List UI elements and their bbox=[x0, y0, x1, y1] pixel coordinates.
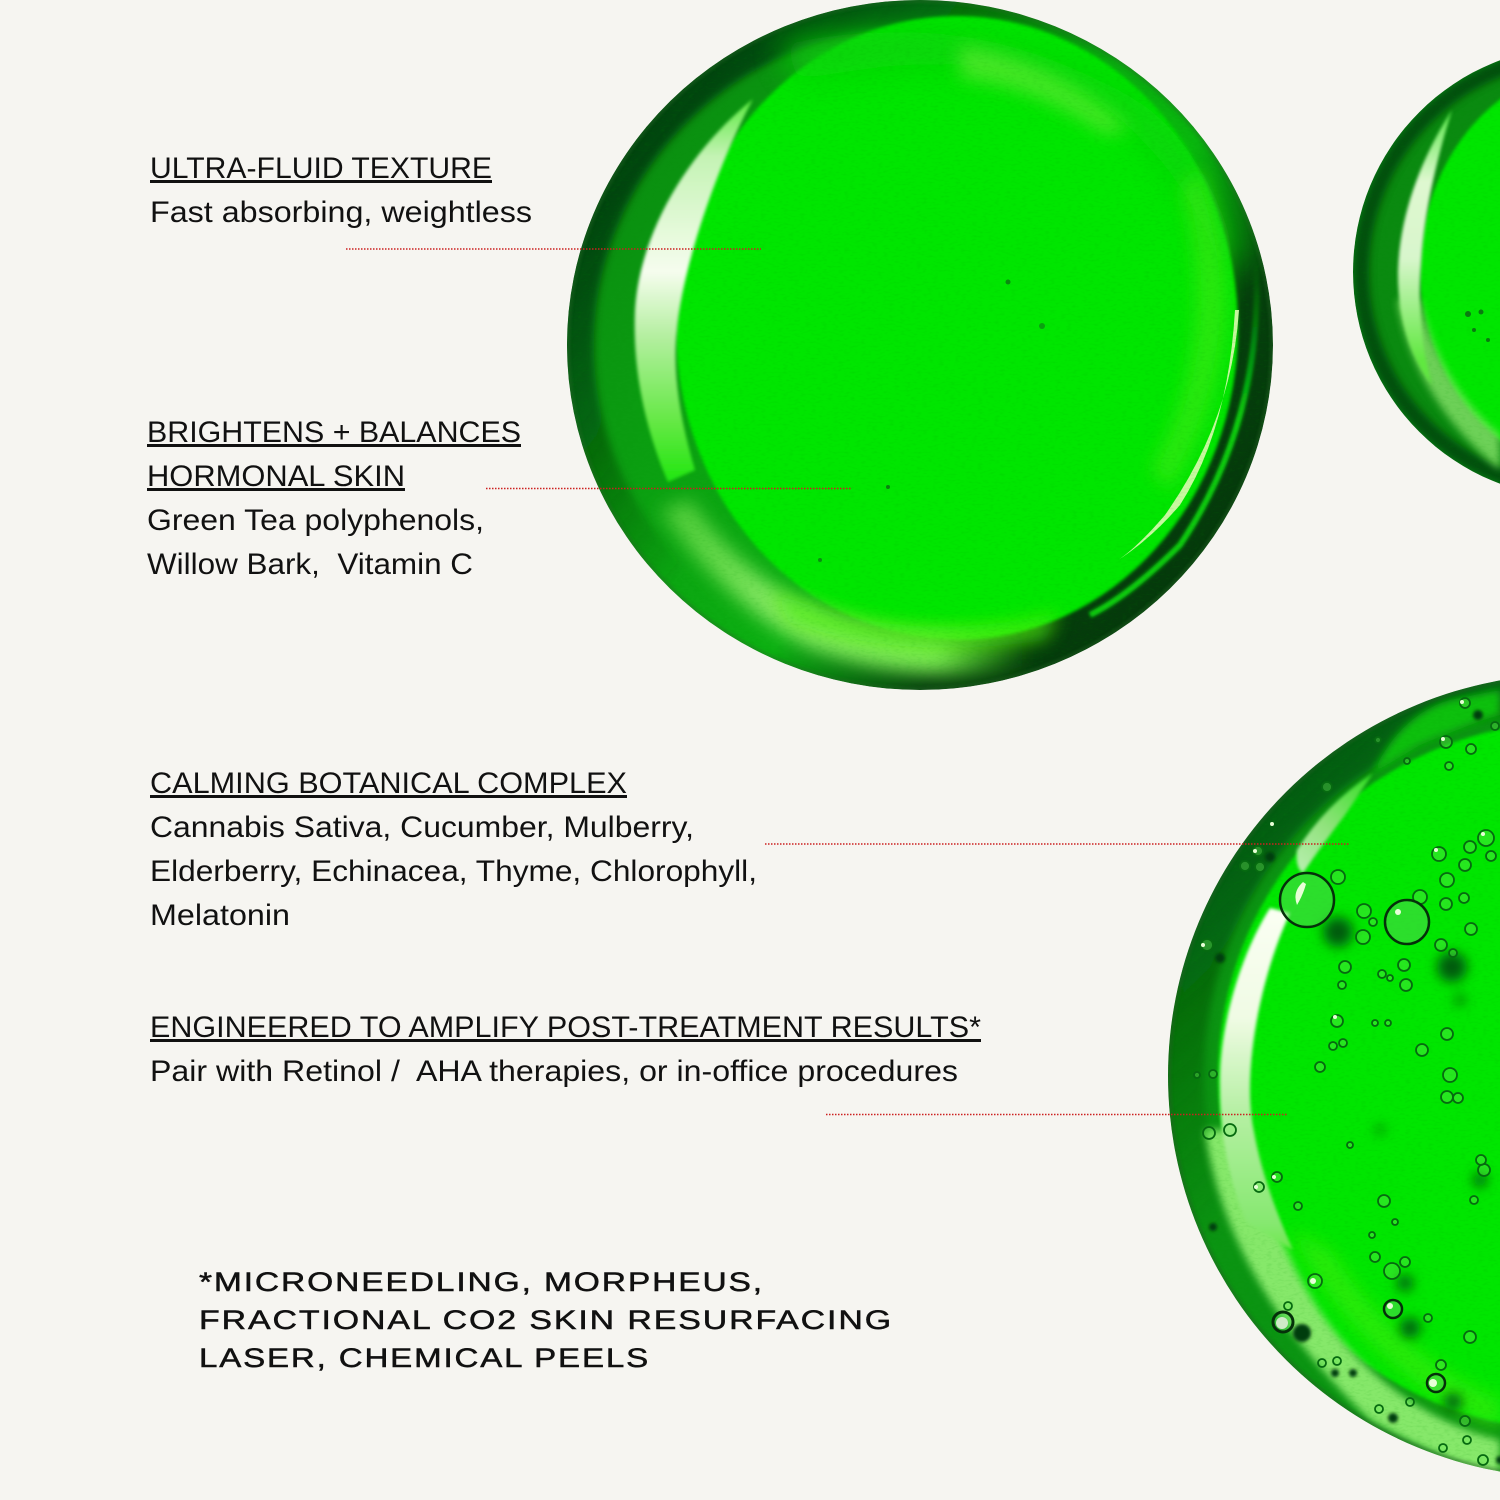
large bubbles bbox=[1273, 873, 1445, 1392]
text block: calming botanical complex: CALMING BOTANICAL COMPLEX bbox=[150, 767, 627, 800]
text block: brightens and balances: Willow Bark, Vitamin C bbox=[147, 548, 473, 581]
text block: ultra-fluid texture: ULTRA-FLUID TEXTURE bbox=[150, 152, 492, 185]
highlights bbox=[1297, 773, 1373, 873]
footnote: LASER, CHEMICAL PEELS bbox=[199, 1343, 650, 1373]
right partial serum drop bbox=[1350, 40, 1500, 500]
text block: brightens and balances: Green Tea polyphenols, bbox=[147, 504, 484, 537]
text block: calming botanical complex bbox=[150, 767, 757, 932]
text block: engineered to amplify: Pair with Retinol / AHA therapies, or in-office procedures bbox=[150, 1055, 958, 1088]
callout line: calming botanical complex bbox=[765, 843, 1349, 845]
large green serum drop bbox=[560, 0, 1280, 700]
text block: ultra-fluid texture: Fast absorbing, weightless bbox=[150, 196, 532, 229]
text block: ultra-fluid texture bbox=[150, 152, 532, 229]
text block: brightens and balances: HORMONAL SKIN bbox=[147, 460, 405, 493]
text block: brightens and balances bbox=[147, 416, 521, 581]
callout line: engineered to amplify bbox=[826, 1114, 1288, 1116]
text block: calming botanical complex: Cannabis Sativa, Cucumber, Mulberry, bbox=[150, 811, 694, 844]
text block: calming botanical complex: Melatonin bbox=[150, 899, 290, 932]
callout line: ultra-fluid texture bbox=[346, 248, 761, 250]
callout line: brightens and balances bbox=[486, 488, 852, 490]
bubbles bbox=[1194, 698, 1499, 1465]
footnote bbox=[199, 1267, 893, 1373]
text block: engineered to amplify: ENGINEERED TO AMPLIFY POST-TREATMENT RESULTS* bbox=[150, 1011, 981, 1044]
text block: engineered to amplify bbox=[150, 1011, 981, 1088]
text block: brightens and balances: BRIGHTENS + BALANCES bbox=[147, 416, 521, 449]
bubble glints bbox=[1201, 700, 1485, 1387]
highlight crescent bbox=[635, 99, 753, 482]
bottom right bubbly serum drop bbox=[1160, 670, 1500, 1490]
highlight bbox=[1398, 110, 1452, 385]
footnote: *MICRONEEDLING, MORPHEUS, bbox=[199, 1267, 764, 1297]
dark patches bbox=[1323, 917, 1487, 1411]
footnote: FRACTIONAL CO2 SKIN RESURFACING bbox=[199, 1305, 893, 1335]
text block: calming botanical complex: Elderberry, Echinacea, Thyme, Chlorophyll, bbox=[150, 855, 757, 888]
